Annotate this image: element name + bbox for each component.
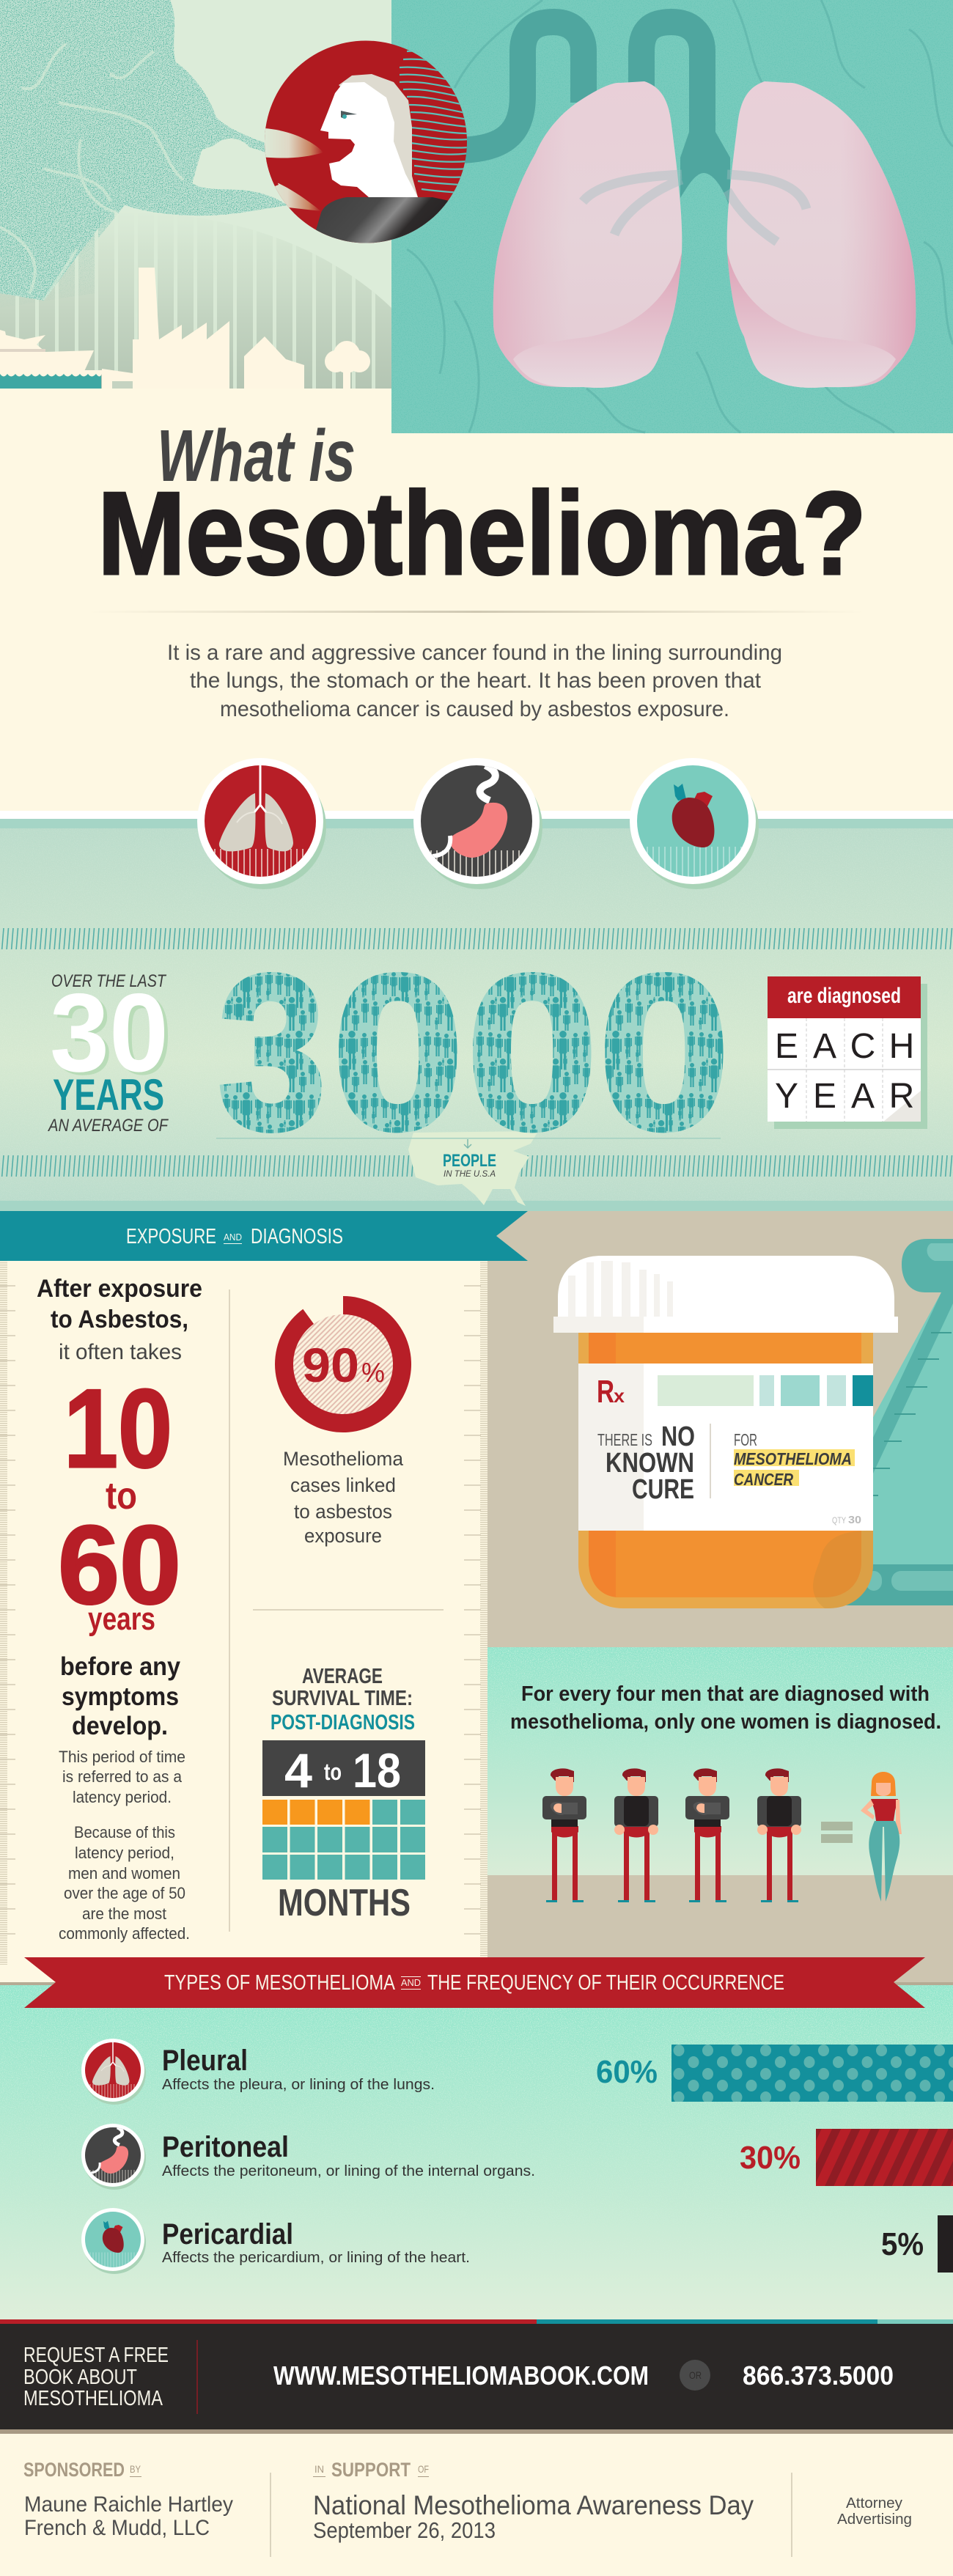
- intro text block: [167, 641, 782, 721]
- latency text block: it often takes: [59, 1340, 182, 1364]
- survival time chart: 18: [353, 1743, 401, 1797]
- survival time chart: AVERAGE: [302, 1665, 383, 1688]
- over the last 30 years text: AN AVERAGE OF: [47, 1116, 169, 1136]
- text: cases linked: cases linked: [290, 1474, 396, 1496]
- footer: in support of: [313, 2459, 754, 2543]
- latency text block: Because of this: [74, 1823, 175, 1841]
- prescription label: KNOWN: [606, 1448, 694, 1479]
- left lung: [493, 81, 682, 388]
- donut chart: 90%: %: [361, 1358, 385, 1388]
- latency text block: After exposure: [37, 1275, 202, 1303]
- latency text block: are the most: [82, 1905, 166, 1923]
- icon: stomach: [413, 758, 542, 889]
- banner: types of mesothelioma: TYPES OF MESOTHELIOMA: [164, 1971, 396, 1995]
- call to action bar: REQUEST A FREE: [23, 2344, 169, 2367]
- calendar: are diagnosed each year: R: [889, 1077, 914, 1116]
- footer: in support of: National Mesothelioma Awareness Day: [313, 2490, 754, 2520]
- men figures: [542, 1768, 801, 1902]
- type row: pleural: Affects the pleura, or lining of the lungs.: [162, 2077, 435, 2093]
- text: cases linked: exposure: [304, 1525, 382, 1547]
- latency text block: symptoms: [62, 1682, 179, 1711]
- prescription label: FOR: [734, 1430, 757, 1449]
- latency text block: latency period,: [75, 1844, 174, 1862]
- calendar: are diagnosed each year: A: [851, 1077, 875, 1116]
- panel: men vs women: [487, 1647, 953, 1902]
- factory silhouette: [102, 268, 304, 389]
- donut chart: 90%: [275, 1296, 411, 1432]
- banner: types of mesothelioma: [24, 1957, 925, 2008]
- latency text block: to: [106, 1475, 137, 1517]
- people in the USA caption: [216, 1138, 721, 1179]
- 3000 people number: 3: [218, 929, 326, 1175]
- over the last 30 years text: YEARS: [53, 1070, 164, 1119]
- banner: types of mesothelioma: AND: [401, 1977, 421, 1988]
- calendar: are diagnosed each year: H: [889, 1027, 914, 1066]
- latency text block: [37, 1275, 202, 1943]
- prescription label: QTY: [832, 1515, 846, 1526]
- footer: in support of: IN: [314, 2463, 324, 2475]
- calendar: are diagnosed each year: [768, 976, 927, 1129]
- type row: pericardial: [81, 2208, 953, 2274]
- intro text block: It is a rare and aggressive cancer found in the lining surrounding: [167, 641, 782, 665]
- footer: attorney advertising: Attorney: [846, 2495, 902, 2511]
- latency text block: men and women: [68, 1864, 180, 1883]
- people in the USA caption: PEOPLE: [443, 1151, 496, 1171]
- survival time chart: 4: [284, 1743, 312, 1797]
- left hero panel: smoke over town: [0, 0, 391, 389]
- type row: pleural: 60%: [596, 2054, 658, 2090]
- type row: pleural: [81, 2039, 953, 2105]
- text: cases linked: to asbestos: [294, 1501, 392, 1523]
- bronchi: [583, 174, 682, 235]
- icon: heart: [630, 758, 759, 889]
- banner: exposure and diagnosis: [0, 1211, 528, 1261]
- latency text block: 10: [64, 1366, 172, 1491]
- footer: sponsored by: SPONSORED: [23, 2459, 125, 2481]
- footer: attorney advertising: [837, 2495, 912, 2528]
- panel: men vs women: For every four men that are diagnosed with: [521, 1682, 930, 1706]
- icon: lungs small: [81, 2039, 146, 2105]
- text: cases linked: [283, 1448, 404, 1547]
- man 3: [685, 1768, 729, 1902]
- footer: in support of: SUPPORT: [331, 2459, 411, 2481]
- prescription label: THERE IS: [597, 1430, 652, 1449]
- breath dust: [265, 128, 323, 158]
- donut chart: 90%: 90: [302, 1338, 359, 1392]
- footer: sponsored by: French & Mudd, LLC: [24, 2516, 210, 2540]
- call to action bar: 866.373.5000: [743, 2360, 894, 2391]
- prescription label: 30: [848, 1514, 861, 1526]
- title: [97, 415, 866, 600]
- call to action bar: [0, 2319, 953, 2434]
- intro text block: mesothelioma cancer is caused by asbestos exposure.: [220, 697, 729, 721]
- man 1: [542, 1768, 586, 1902]
- woman figure: [861, 1772, 902, 1902]
- footer: attorney advertising: Advertising: [837, 2511, 912, 2528]
- banner: exposure and diagnosis: EXPOSURE: [126, 1225, 216, 1248]
- calendar: are diagnosed each year: E: [775, 1027, 798, 1066]
- calendar: are diagnosed each year: are diagnosed: [787, 984, 901, 1008]
- ship and sea: [0, 330, 94, 376]
- hair: [339, 74, 418, 197]
- face: [320, 82, 418, 197]
- prescription label: R: [597, 1374, 614, 1410]
- latency text block: over the age of 50: [64, 1884, 185, 1902]
- 3000 people number: 0: [332, 929, 464, 1175]
- bottle cap: [553, 1256, 898, 1333]
- over the last 30 years text: OVER THE LAST: [51, 971, 167, 991]
- latency text block: This period of time: [59, 1748, 185, 1766]
- 3000 people number: 0: [466, 929, 598, 1175]
- bar: 5%: [938, 2215, 953, 2273]
- green statistics band: [0, 811, 953, 1211]
- USA map: [408, 1131, 538, 1206]
- type row: pericardial: Affects the pericardium, or lining of the heart.: [162, 2250, 470, 2266]
- type row: pleural: Pleural: [162, 2045, 248, 2077]
- head profile in circle: [260, 41, 469, 249]
- survival time chart: to: [324, 1759, 342, 1785]
- bar: 30%: [816, 2129, 953, 2186]
- prescription label: CURE: [632, 1474, 694, 1505]
- calendar: are diagnosed each year: Y: [775, 1077, 798, 1116]
- hero illustration: [0, 0, 953, 433]
- bottle body: [578, 1333, 873, 1608]
- footer: in support of: September 26, 2013: [313, 2517, 496, 2543]
- call to action bar: OR: [689, 2369, 702, 2381]
- tree: [325, 341, 370, 389]
- survival time chart: MONTHS: [278, 1882, 411, 1924]
- prescription label: CANCER: [734, 1470, 793, 1489]
- latency text block: before any: [60, 1652, 180, 1681]
- 3000 people number: 0: [598, 929, 730, 1175]
- equals sign: [821, 1822, 853, 1843]
- survival time chart: [262, 1665, 425, 1924]
- type row: pericardial: 5%: [881, 2226, 924, 2262]
- type row: peritoneal: [81, 2124, 953, 2190]
- right hero panel: [391, 0, 953, 433]
- text: cases linked: Mesothelioma: [283, 1448, 404, 1470]
- survival time chart: POST-DIAGNOSIS: [271, 1711, 415, 1734]
- over the last 30 years text: 30: [50, 971, 169, 1095]
- 3000 people number: [218, 929, 730, 1175]
- prescription label: [578, 1364, 873, 1531]
- type row: peritoneal: Peritoneal: [162, 2131, 289, 2163]
- latency text block: years: [88, 1601, 155, 1637]
- survival time chart: SURVIVAL TIME:: [272, 1687, 413, 1710]
- prescription label: NO: [661, 1421, 695, 1452]
- latency text block: develop.: [72, 1712, 168, 1740]
- people in the USA caption: IN THE U.S.A: [444, 1169, 496, 1179]
- man 2: [614, 1768, 658, 1902]
- title: What is: [157, 415, 356, 497]
- footer: sponsored by: [23, 2459, 233, 2540]
- right lung: [727, 81, 916, 388]
- icon: stomach small: [81, 2124, 146, 2190]
- eye: [341, 111, 357, 119]
- prescription label: x: [614, 1385, 625, 1407]
- type row: pericardial: Pericardial: [162, 2218, 293, 2251]
- over the last 30 years text: 30: [54, 974, 172, 1098]
- footer: sponsored by: Maune Raichle Hartley: [24, 2492, 233, 2517]
- title: Mesothelioma?: [97, 468, 866, 600]
- latency text block: to Asbestos,: [51, 1306, 188, 1333]
- banner: exposure and diagnosis: AND: [224, 1232, 242, 1243]
- call to action bar: BOOK ABOUT: [23, 2366, 137, 2389]
- footer: sponsored by: BY: [130, 2463, 141, 2475]
- latency text block: is referred to as a: [62, 1767, 183, 1786]
- pill bottle: [553, 1256, 898, 1608]
- banner: types of mesothelioma: THE FREQUENCY OF THEIR OCCURRENCE: [427, 1971, 784, 1995]
- intro text block: the lungs, the stomach or the heart. It has been proven that: [190, 669, 762, 693]
- latency text block: commonly affected.: [59, 1924, 190, 1943]
- latency text block: 60: [58, 1503, 181, 1627]
- type row: peritoneal: 30%: [740, 2140, 801, 2176]
- trachea tube: [455, 22, 702, 150]
- types panel background: [0, 1965, 953, 2319]
- organ icons row: [197, 758, 759, 889]
- icon: heart small: [81, 2208, 146, 2274]
- footer: in support of: OF: [418, 2463, 429, 2475]
- flask illustration: [806, 1239, 953, 1605]
- calendar: are diagnosed each year: C: [850, 1027, 875, 1066]
- calendar: are diagnosed each year: A: [813, 1027, 836, 1066]
- panel: exposure and diagnosis: [0, 1211, 953, 1985]
- call to action bar: WWW.MESOTHELIOMABOOK.COM: [273, 2360, 649, 2391]
- shoulders: [316, 197, 449, 243]
- icon: lungs: [197, 758, 326, 889]
- calendar: are diagnosed each year: E: [813, 1077, 836, 1116]
- call to action bar: MESOTHELIOMA: [23, 2387, 163, 2410]
- man 4: [757, 1768, 801, 1902]
- prescription label: MESOTHELIOMA: [734, 1449, 852, 1468]
- bar: 60%: [671, 2045, 953, 2102]
- banner: exposure and diagnosis: DIAGNOSIS: [251, 1225, 343, 1248]
- type row: peritoneal: Affects the peritoneum, or lining of the internal organs.: [162, 2163, 535, 2179]
- latency text block: latency period.: [73, 1788, 172, 1806]
